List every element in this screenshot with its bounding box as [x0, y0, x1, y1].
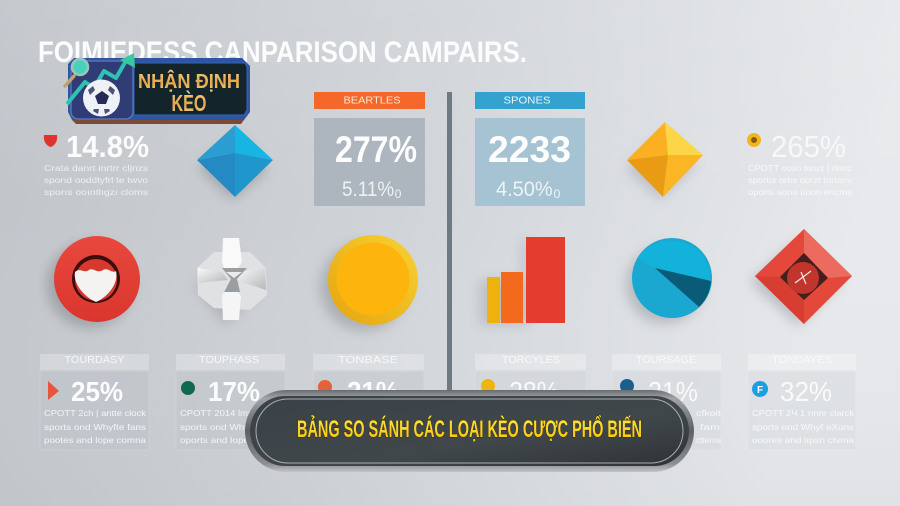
icon: blue diamond [197, 125, 273, 200]
icon: yellow disc [320, 235, 418, 331]
card: Torcyles: 28% [509, 376, 559, 407]
bar chart icon [480, 237, 565, 325]
stat description: oports aorıs tınon erıcms [748, 187, 852, 197]
card: Tonbaase [313, 354, 424, 450]
yellow bar [487, 277, 500, 323]
icon: red flag [48, 381, 59, 400]
card: Toupnass: oports and lope comna [180, 435, 282, 445]
icon: blue pie disc [626, 238, 712, 324]
card: Tourdasy [40, 354, 149, 450]
stat: 14.8% [44, 129, 149, 197]
orange header [314, 92, 425, 109]
panel: Spones: 2233 [488, 129, 571, 170]
card: Tondayes: ooores and lıpsn ctvma [752, 435, 854, 445]
icon: red button with heart [47, 236, 140, 328]
panel: Beartles: 277% [335, 129, 417, 170]
stat: 14.8%: 14.8% [66, 129, 149, 164]
card: Toursage: 21% [648, 376, 698, 407]
card: Toupnass: sports ond Whyfte fans [180, 422, 282, 432]
icon: red diamond with football [750, 229, 852, 326]
panel: Spones: 4.50%₀ [496, 178, 561, 201]
card: Toursage: cfkoit [696, 408, 722, 418]
banner [245, 390, 694, 472]
panel: Beartles: 5.11%₀ [342, 178, 402, 201]
panel: Spones [475, 92, 585, 206]
logo: Nhận Định Kèo: KÈO [172, 89, 206, 116]
stat: 265% [747, 129, 853, 197]
logo: Nhận Định Kèo [65, 53, 250, 124]
icon: gold coin [747, 133, 761, 147]
card: Toursage [612, 354, 722, 450]
card: Toursage: ctterns [696, 435, 721, 445]
grey value box [314, 118, 425, 206]
icon: red heart badge [44, 135, 57, 147]
icon: gold badge [481, 379, 495, 393]
title: FOIMIEDESS CANPARISON CAMPAIRS. [38, 36, 527, 69]
icon: navy badge [620, 379, 634, 393]
card: Tonbaase: TONBASE [338, 354, 398, 366]
card: Tourdasy: sports ond Whyfte fans [44, 422, 146, 432]
card: Torcyles [475, 354, 586, 450]
card: Tondayes: sports ond Whyf eXons [752, 422, 854, 432]
card: Toursage: TOURSAGE [636, 354, 696, 366]
icon: blue F badge: F [757, 385, 763, 396]
logo: magnifier [65, 59, 88, 86]
stat description [44, 163, 148, 197]
card: Tondayes: CPOTT 2Ч 1 rınnr clarck [752, 408, 855, 418]
card: Tourdasy: TOURDASY [64, 354, 124, 366]
stat: 265%: 265% [771, 129, 846, 164]
card: Tourdasy: pootes and lope comna [44, 435, 146, 445]
icon: orange badge [318, 380, 332, 394]
light blue value box [475, 118, 585, 206]
logo wordmark: NHẬN ĐỊNH [138, 69, 240, 93]
card: Toupnass: 17% [208, 376, 260, 407]
panel: Beartles: BEARTLES [344, 96, 401, 106]
stat description [748, 163, 853, 197]
card: Tonbaase: 21% [347, 376, 399, 407]
stat description: Crata danrt inrtrr cljnzs [44, 163, 148, 173]
panel: Spones: SPONES [504, 96, 551, 106]
card: Toursage: fam [700, 422, 720, 432]
icon: green badge [181, 381, 195, 395]
card: Tourdasy: CPOTT 2ch | antte clock [44, 408, 147, 418]
card: Tondayes [748, 354, 856, 450]
card: Tondayes: 32% [780, 376, 832, 407]
stat description: sporıd ooddtyfrl te twvo [44, 175, 148, 185]
red bar [526, 237, 565, 323]
card: Tondayes: TONDAYES [772, 354, 832, 366]
panel: Beartles [314, 92, 425, 206]
card: Toupnass [176, 354, 285, 450]
banner text: BẢNG SO SÁNH CÁC LOẠI KÈO CƯỢC PHỔ BIẾN [297, 414, 642, 443]
logo: arrow head [120, 53, 135, 68]
divider [447, 92, 452, 392]
card: Toupnass: TOUPHASS [199, 354, 259, 366]
logo: soccer ball [83, 80, 120, 116]
blue header [475, 92, 585, 109]
stat description: CPOTT ooso tonrz I rlonz [748, 163, 852, 173]
card: Toupnass: CPOTT 2014 lmsh clock [180, 408, 283, 418]
icon: yellow diamond [626, 122, 703, 200]
stat description: sporıs ooıntlıgzı cloms [44, 187, 148, 197]
stat description: sportıs ortıs oprzt tnrtonv [748, 175, 853, 185]
card: Tourdasy: 25% [71, 376, 123, 407]
orange bar [501, 272, 523, 323]
logo: rising arrow [67, 59, 127, 104]
banner frame [245, 390, 694, 472]
icon: silver faceted shape [194, 238, 267, 325]
card: Torcyles: TORCYLES [502, 354, 560, 366]
